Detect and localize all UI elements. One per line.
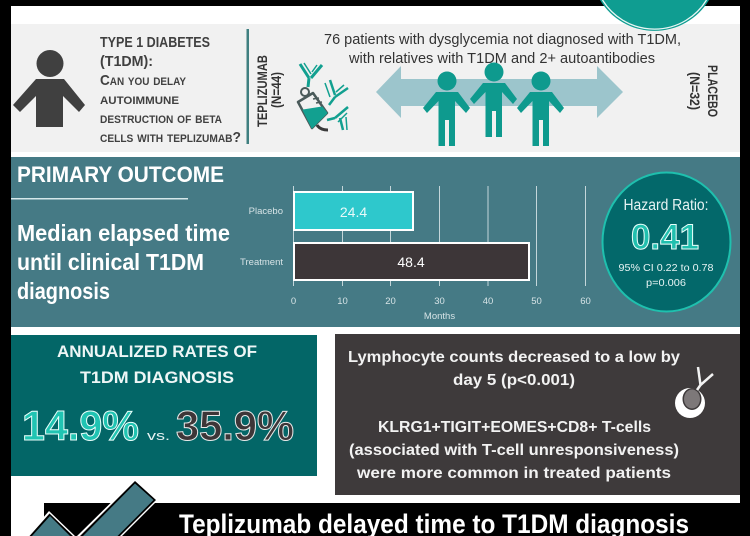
axis labels: 0	[291, 296, 296, 307]
banner: conclusion	[27, 479, 750, 536]
heading: annualized rates	[57, 342, 257, 387]
stat: 14.9% vs 35.9%: 35.9%	[176, 402, 294, 449]
bar: placebo	[294, 192, 413, 230]
callout: hazard ratio	[602, 172, 730, 312]
panel: primary outcome	[11, 157, 740, 327]
icon: check mark	[27, 479, 158, 536]
axis labels: Treatment	[240, 257, 283, 268]
icon: three patients	[423, 62, 564, 146]
callout: hazard ratio: Hazard Ratio:	[624, 197, 708, 214]
heading: type 1 diabetes question	[100, 34, 241, 146]
heading: type 1 diabetes question: Can you delay	[100, 72, 187, 89]
text: median elapsed time: until clinical T1DM	[17, 249, 204, 275]
axis labels: 60	[580, 296, 591, 307]
bar: placebo: 24.4	[340, 204, 367, 220]
heading: type 1 diabetes question: TYPE 1 DIABETES	[100, 34, 210, 51]
bar chart: median months to diagnosis	[240, 186, 591, 322]
heading: type 1 diabetes question: cells with teplizumab?	[100, 129, 241, 146]
text: lymphocyte findings: (associated with T-cell unresponsiveness)	[349, 442, 679, 459]
text: median elapsed time: diagnosis	[17, 278, 110, 304]
text: study population: with relatives with T1DM and 2+ autoantibodies	[348, 50, 655, 67]
icon: T cell with receptor	[675, 367, 713, 418]
text: study population: 76 patients with dysglycemia not diagnosed with T1DM,	[324, 31, 681, 48]
stat: 14.9% vs 35.9%: vs.	[147, 428, 170, 443]
stat: 14.9% vs 35.9%: 14.9%	[22, 402, 139, 449]
axis labels: 40	[483, 296, 493, 307]
icon: person	[13, 50, 85, 127]
axis labels: Months	[424, 311, 455, 322]
label: placebo arm: PLACEBO	[705, 65, 720, 117]
callout: hazard ratio: 95% CI 0.22 to 0.78	[618, 262, 714, 274]
text: lymphocyte findings: Lymphocyte counts decreased to a low by	[348, 349, 680, 366]
text: median elapsed time	[17, 220, 230, 304]
heading: type 1 diabetes question: autoimmune	[100, 91, 179, 108]
top right badge circle	[600, 0, 709, 31]
callout: hazard ratio: 0.41	[631, 218, 699, 257]
label: teplizumab arm: (N=44)	[269, 72, 284, 108]
axis labels: 50	[531, 296, 542, 307]
callout: hazard ratio: p=0.006	[646, 277, 686, 289]
text: median elapsed time: Median elapsed time	[17, 220, 230, 246]
stat: 14.9% vs 35.9%	[22, 402, 294, 449]
arrow: randomization double arrow	[376, 66, 623, 118]
axis labels: 20	[385, 296, 396, 307]
text: lymphocyte findings: KLRG1+TIGIT+EOMES+CD8+ T-cells	[378, 419, 651, 436]
heading: type 1 diabetes question: destruction of beta	[100, 110, 222, 127]
label: teplizumab arm	[255, 55, 284, 127]
axis labels: 30	[434, 296, 445, 307]
label: placebo arm	[687, 65, 720, 117]
panel: study background	[11, 24, 740, 152]
bar: treatment	[294, 243, 529, 280]
label: teplizumab arm: TEPLIZUMAB	[255, 55, 270, 127]
axis labels	[240, 206, 591, 322]
text: lymphocyte findings: were more common in treated patients	[356, 465, 671, 482]
text: study population	[324, 31, 681, 67]
panel: annualized rates	[11, 335, 317, 476]
icon: IV bag and antibodies	[298, 63, 348, 130]
label: placebo arm: (N=32)	[687, 72, 702, 110]
text: lymphocyte findings: day 5 (p<0.001)	[453, 372, 575, 389]
panel: lymphocyte findings	[335, 334, 740, 495]
text: lymphocyte findings	[348, 349, 680, 482]
heading: annualized rates: ANNUALIZED RATES OF	[57, 342, 257, 361]
axis labels: 10	[337, 296, 348, 307]
heading: annualized rates: T1DM DIAGNOSIS	[80, 368, 234, 387]
heading: primary outcome: PRIMARY OUTCOME	[17, 162, 224, 187]
heading: type 1 diabetes question: (T1DM):	[100, 53, 153, 70]
bar: treatment: 48.4	[397, 254, 425, 270]
axis labels: Placebo	[249, 206, 283, 217]
